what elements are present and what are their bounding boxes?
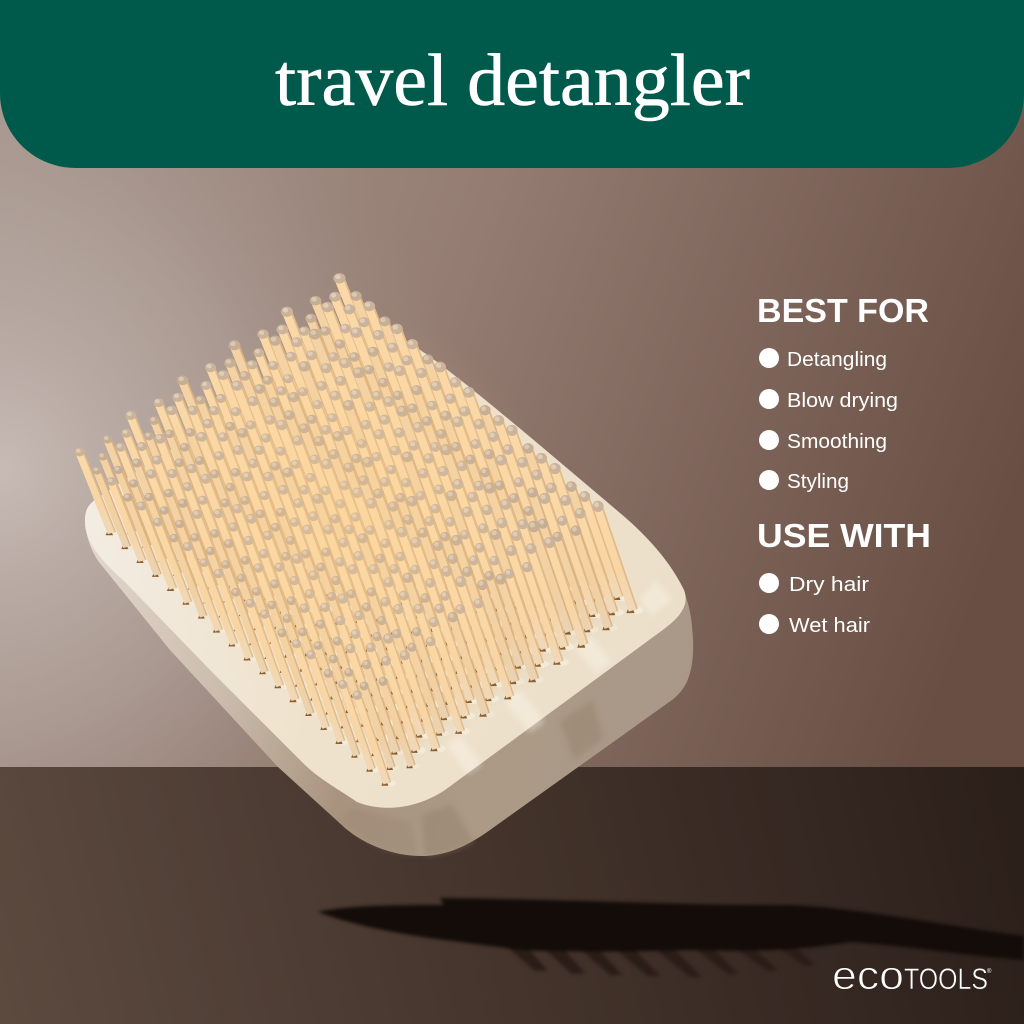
panel: use with bbox=[757, 517, 931, 637]
item: wet hair bbox=[759, 614, 870, 637]
heading: use with: USE WITH bbox=[757, 517, 931, 554]
logo: ecotools: eco bbox=[832, 954, 904, 998]
logo: ecotools: TOOLS bbox=[904, 963, 988, 996]
item: dry hair bbox=[759, 573, 869, 596]
brush top face bbox=[85, 341, 686, 808]
bamboo side panels bbox=[340, 700, 603, 856]
logo: ecotools bbox=[832, 954, 992, 998]
warm light glow bbox=[145, 310, 545, 710]
header band bbox=[0, 0, 1024, 168]
title: travel detangler bbox=[275, 40, 750, 122]
bristle pins bbox=[74, 273, 643, 787]
brush shadow on floor bbox=[318, 898, 1024, 977]
panel: best for bbox=[757, 292, 929, 493]
brush bbox=[74, 273, 693, 856]
item: blow drying: Blow drying bbox=[787, 389, 898, 412]
item: styling bbox=[759, 470, 849, 493]
brush body side edge bbox=[85, 490, 693, 856]
item: wet hair: Wet hair bbox=[789, 614, 870, 637]
item: detangling: Detangling bbox=[787, 348, 887, 371]
lit stripes on wood bbox=[447, 580, 672, 775]
logo: ecotools: ® bbox=[987, 968, 992, 975]
item: styling: Styling bbox=[787, 470, 849, 493]
floor surface bbox=[0, 767, 1024, 1024]
item: dry hair: Dry hair bbox=[789, 573, 869, 596]
warm shaded pin field bbox=[170, 400, 610, 750]
heading: best for: BEST FOR bbox=[757, 292, 929, 329]
background wall bbox=[0, 0, 1024, 768]
item: smoothing: Smoothing bbox=[787, 430, 887, 453]
